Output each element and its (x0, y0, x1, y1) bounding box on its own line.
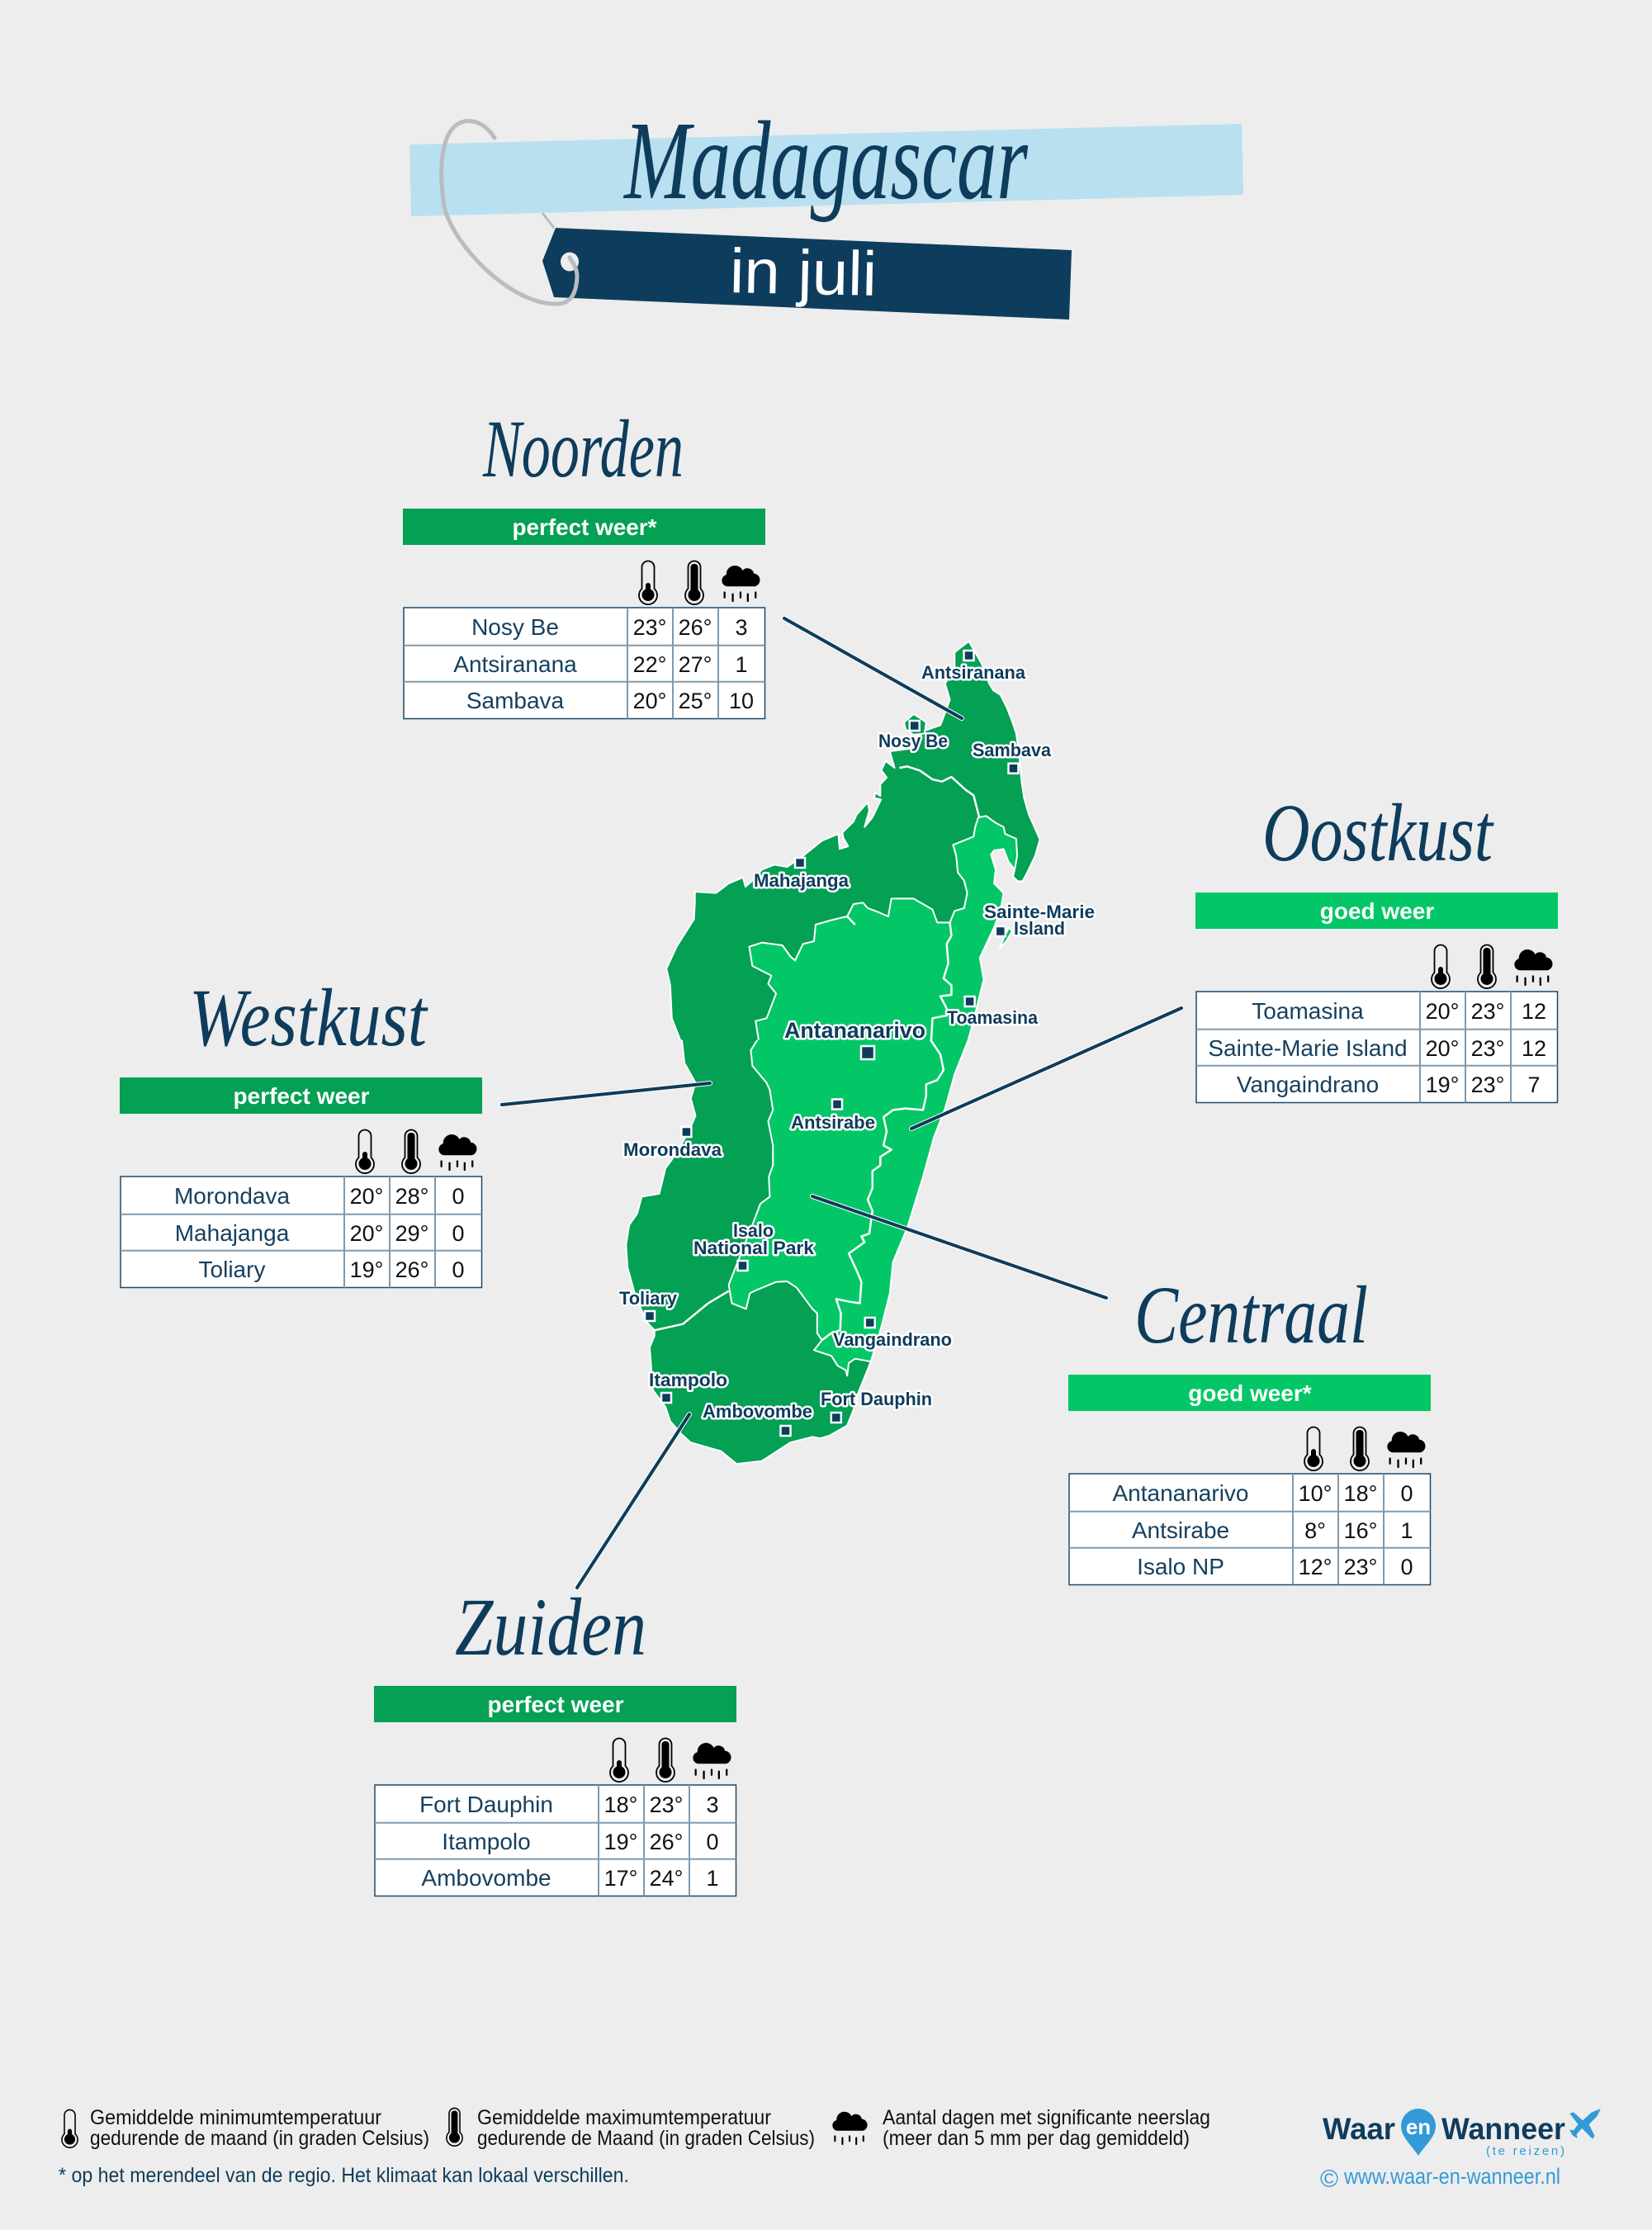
dark luggage tag (542, 228, 1072, 320)
map city labels: Mahajanga (754, 870, 850, 891)
climate table: 20° (1426, 1036, 1459, 1061)
climate table: Antananarivo (1112, 1480, 1249, 1506)
climate table: 7 (1527, 1072, 1541, 1097)
panel: Centraal (1068, 1269, 1431, 1585)
climate table: Antsiranana (453, 651, 577, 677)
map city labels (619, 662, 1095, 1422)
climate table: 20° (350, 1184, 383, 1209)
weather badge: perfect weer (234, 1083, 370, 1109)
map city labels: Antananarivo (784, 1018, 925, 1043)
logo: Waar en Wanneer (1320, 2109, 1600, 2193)
legend text: max temperature: gedurende de Maand (in graden Celsius) (477, 2127, 815, 2150)
panel: Noorden (403, 403, 765, 718)
climate table: 26° (679, 615, 712, 640)
climate table (375, 1785, 736, 1896)
climate table: 20° (633, 689, 666, 713)
climate table: 24° (650, 1866, 683, 1891)
map city labels: Sambava (973, 740, 1052, 760)
map city labels: Antsiranana (921, 662, 1026, 683)
climate table: 23° (1471, 1072, 1504, 1097)
climate table: Morondava (174, 1183, 290, 1209)
climate table: 28° (395, 1184, 428, 1209)
climate table: 19° (350, 1257, 383, 1282)
legend text: rain (883, 2106, 1210, 2150)
map city labels: National Park (693, 1238, 815, 1258)
climate table: Sainte-Marie Island (1208, 1035, 1408, 1061)
panel: Zuiden (374, 1581, 736, 1896)
legend text: min temperature: Gemiddelde minimumtemperatuur (90, 2106, 381, 2129)
climate table: 23° (633, 615, 666, 640)
legend icon: max temperature (447, 2108, 462, 2146)
climate table: 0 (452, 1257, 465, 1282)
weather badge: perfect weer* (512, 514, 657, 540)
panel: Oostkust (1195, 787, 1558, 1103)
climate table: Vangaindrano (1237, 1072, 1379, 1097)
climate table: Toamasina (1252, 998, 1364, 1024)
climate table: 0 (1400, 1481, 1413, 1506)
climate table: Itampolo (442, 1829, 531, 1854)
legend text: min temperature (90, 2106, 429, 2150)
legend text: rain: Aantal dagen met significante neerslag (883, 2106, 1210, 2129)
icon: min temperature (1304, 1427, 1323, 1470)
icon: min temperature (1432, 945, 1450, 988)
climate table: 19° (1426, 1072, 1459, 1097)
climate table: 0 (452, 1184, 465, 1209)
copyright and website (1320, 2164, 1560, 2193)
tag hole (561, 253, 579, 271)
climate table: Isalo NP (1137, 1554, 1224, 1579)
climate table: Fort Dauphin (419, 1792, 553, 1817)
connector: Westkust (502, 1083, 710, 1105)
copyright and website: www.waar-en-wanneer.nl (1343, 2164, 1560, 2189)
climate table: 17° (604, 1866, 637, 1891)
climate table: 0 (706, 1830, 719, 1854)
climate table: 23° (650, 1792, 683, 1817)
map city labels: Toliary (619, 1288, 678, 1309)
legend text: max temperature: Gemiddelde maximumtemperatuur (477, 2106, 771, 2129)
map city labels: Isalo (733, 1220, 774, 1241)
main title: Madagascar (623, 99, 1029, 223)
climate table: Antsirabe (1132, 1517, 1229, 1543)
title banner: Madagascar in juli (409, 99, 1243, 320)
climate table: 1 (735, 652, 748, 677)
climate table: Ambovombe (421, 1865, 551, 1891)
icon: location pin (1401, 2109, 1436, 2156)
legend icon: min temperature (62, 2109, 78, 2147)
connector: Noorden (784, 618, 962, 718)
climate table: 25° (679, 689, 712, 713)
weather badge (374, 1686, 736, 1722)
icon: max temperature (656, 1739, 675, 1782)
heading: Westkust: Westkust (189, 972, 428, 1063)
weather badge (1068, 1375, 1431, 1411)
icon: rain (1387, 1432, 1425, 1467)
climate table: 23° (1471, 999, 1504, 1024)
logo tagline: (te reizen) (1486, 2144, 1564, 2158)
weather badge (403, 509, 765, 545)
icon: max temperature (1351, 1427, 1369, 1470)
climate table: 8° (1304, 1518, 1326, 1543)
climate table (404, 608, 764, 718)
map city labels: Itampolo (649, 1370, 727, 1390)
climate table: 27° (679, 652, 712, 677)
legend text: min temperature: gedurende de maand (in graden Celsius) (90, 2127, 429, 2150)
climate table: 19° (604, 1830, 637, 1854)
map north half (666, 642, 1040, 1046)
climate table: 22° (633, 652, 666, 677)
icon: rain (438, 1134, 476, 1170)
map city labels: Ambovombe (703, 1401, 812, 1422)
map city labels: Sainte-Marie (984, 902, 1095, 922)
map city labels: Nosy Be (878, 731, 948, 751)
weather badge (1195, 892, 1558, 929)
climate table (121, 1177, 482, 1288)
climate table: 18° (1344, 1481, 1377, 1506)
icon: rain (693, 1743, 731, 1778)
icon: max temperature (685, 561, 703, 604)
climate table: 3 (735, 615, 748, 640)
heading: Zuiden: Zuiden (455, 1581, 646, 1673)
climate table: Mahajanga (175, 1220, 290, 1246)
icon: max temperature (402, 1129, 420, 1173)
map city labels: Island (1014, 918, 1065, 939)
climate table: 0 (1400, 1555, 1413, 1579)
climate table: 3 (706, 1792, 719, 1817)
logo word: Waar: Waar (1323, 2112, 1395, 2146)
climate table: 1 (1400, 1518, 1413, 1543)
heading: Oostkust: Oostkust (1262, 787, 1494, 878)
climate table: 12 (1522, 999, 1546, 1024)
climate table: 12 (1522, 1036, 1546, 1061)
climate table: 26° (395, 1257, 428, 1282)
icon: min temperature (356, 1129, 374, 1173)
legend (59, 2106, 1210, 2187)
climate table: 23° (1344, 1555, 1377, 1579)
tag string loop (442, 121, 577, 304)
weather badge (120, 1077, 482, 1114)
map city labels: Toamasina (947, 1007, 1039, 1028)
panel: Westkust (120, 972, 482, 1288)
map city labels: Morondava (623, 1139, 722, 1160)
icon: min temperature (639, 561, 657, 604)
climate table: Nosy Be (471, 614, 559, 640)
climate table: 23° (1471, 1036, 1504, 1061)
legend text: rain: (meer dan 5 mm per dag gemiddeld) (883, 2127, 1190, 2150)
climate table: 16° (1344, 1518, 1377, 1543)
icon: rain (722, 566, 760, 601)
footnote: * op het merendeel van de regio. Het klimaat kan lokaal verschillen. (59, 2164, 629, 2187)
weather badge: goed weer (1320, 898, 1434, 924)
weather badge: goed weer* (1188, 1380, 1312, 1406)
tag string back (542, 213, 554, 228)
icon: rain (1514, 949, 1552, 985)
copyright and website: © (1320, 2166, 1338, 2193)
climate table: 20° (350, 1221, 383, 1246)
map city labels: Vangaindrano (833, 1329, 952, 1350)
connector: Oostkust (911, 1008, 1181, 1129)
weather badge: perfect weer (488, 1692, 624, 1717)
climate table: 10° (1299, 1481, 1332, 1506)
icon: max temperature (1478, 945, 1496, 988)
light blue title ribbon (409, 124, 1243, 216)
climate table: Toliary (199, 1257, 265, 1282)
climate table: Sambava (466, 688, 565, 713)
logo word: Wanneer: Wanneer (1441, 2112, 1565, 2146)
connector: Centraal (812, 1196, 1106, 1298)
map city labels: Antsirabe (791, 1112, 875, 1133)
legend icon: rain (832, 2112, 868, 2144)
icon: location pin: en (1406, 2114, 1431, 2139)
climate table (1069, 1474, 1430, 1585)
climate table (1196, 992, 1557, 1103)
climate table: 12° (1299, 1555, 1332, 1579)
climate table: 18° (604, 1792, 637, 1817)
connector: Zuiden (577, 1414, 689, 1588)
climate table: 0 (452, 1221, 465, 1246)
legend text: max temperature (477, 2106, 815, 2150)
climate table: 20° (1426, 999, 1459, 1024)
climate table: 1 (706, 1866, 719, 1891)
icon: airplane (1570, 2109, 1600, 2138)
climate table: 26° (650, 1830, 683, 1854)
city markers (645, 651, 1019, 1436)
heading: Centraal: Centraal (1134, 1269, 1368, 1361)
climate table: 10 (729, 689, 754, 713)
map of Madagascar (626, 642, 1040, 1464)
icon: min temperature (610, 1739, 628, 1782)
map city labels: Fort Dauphin (821, 1389, 932, 1409)
climate table: 29° (395, 1221, 428, 1246)
subtitle: in juli (729, 236, 878, 310)
heading: Noorden: Noorden (482, 403, 684, 495)
map south half (626, 1035, 970, 1464)
